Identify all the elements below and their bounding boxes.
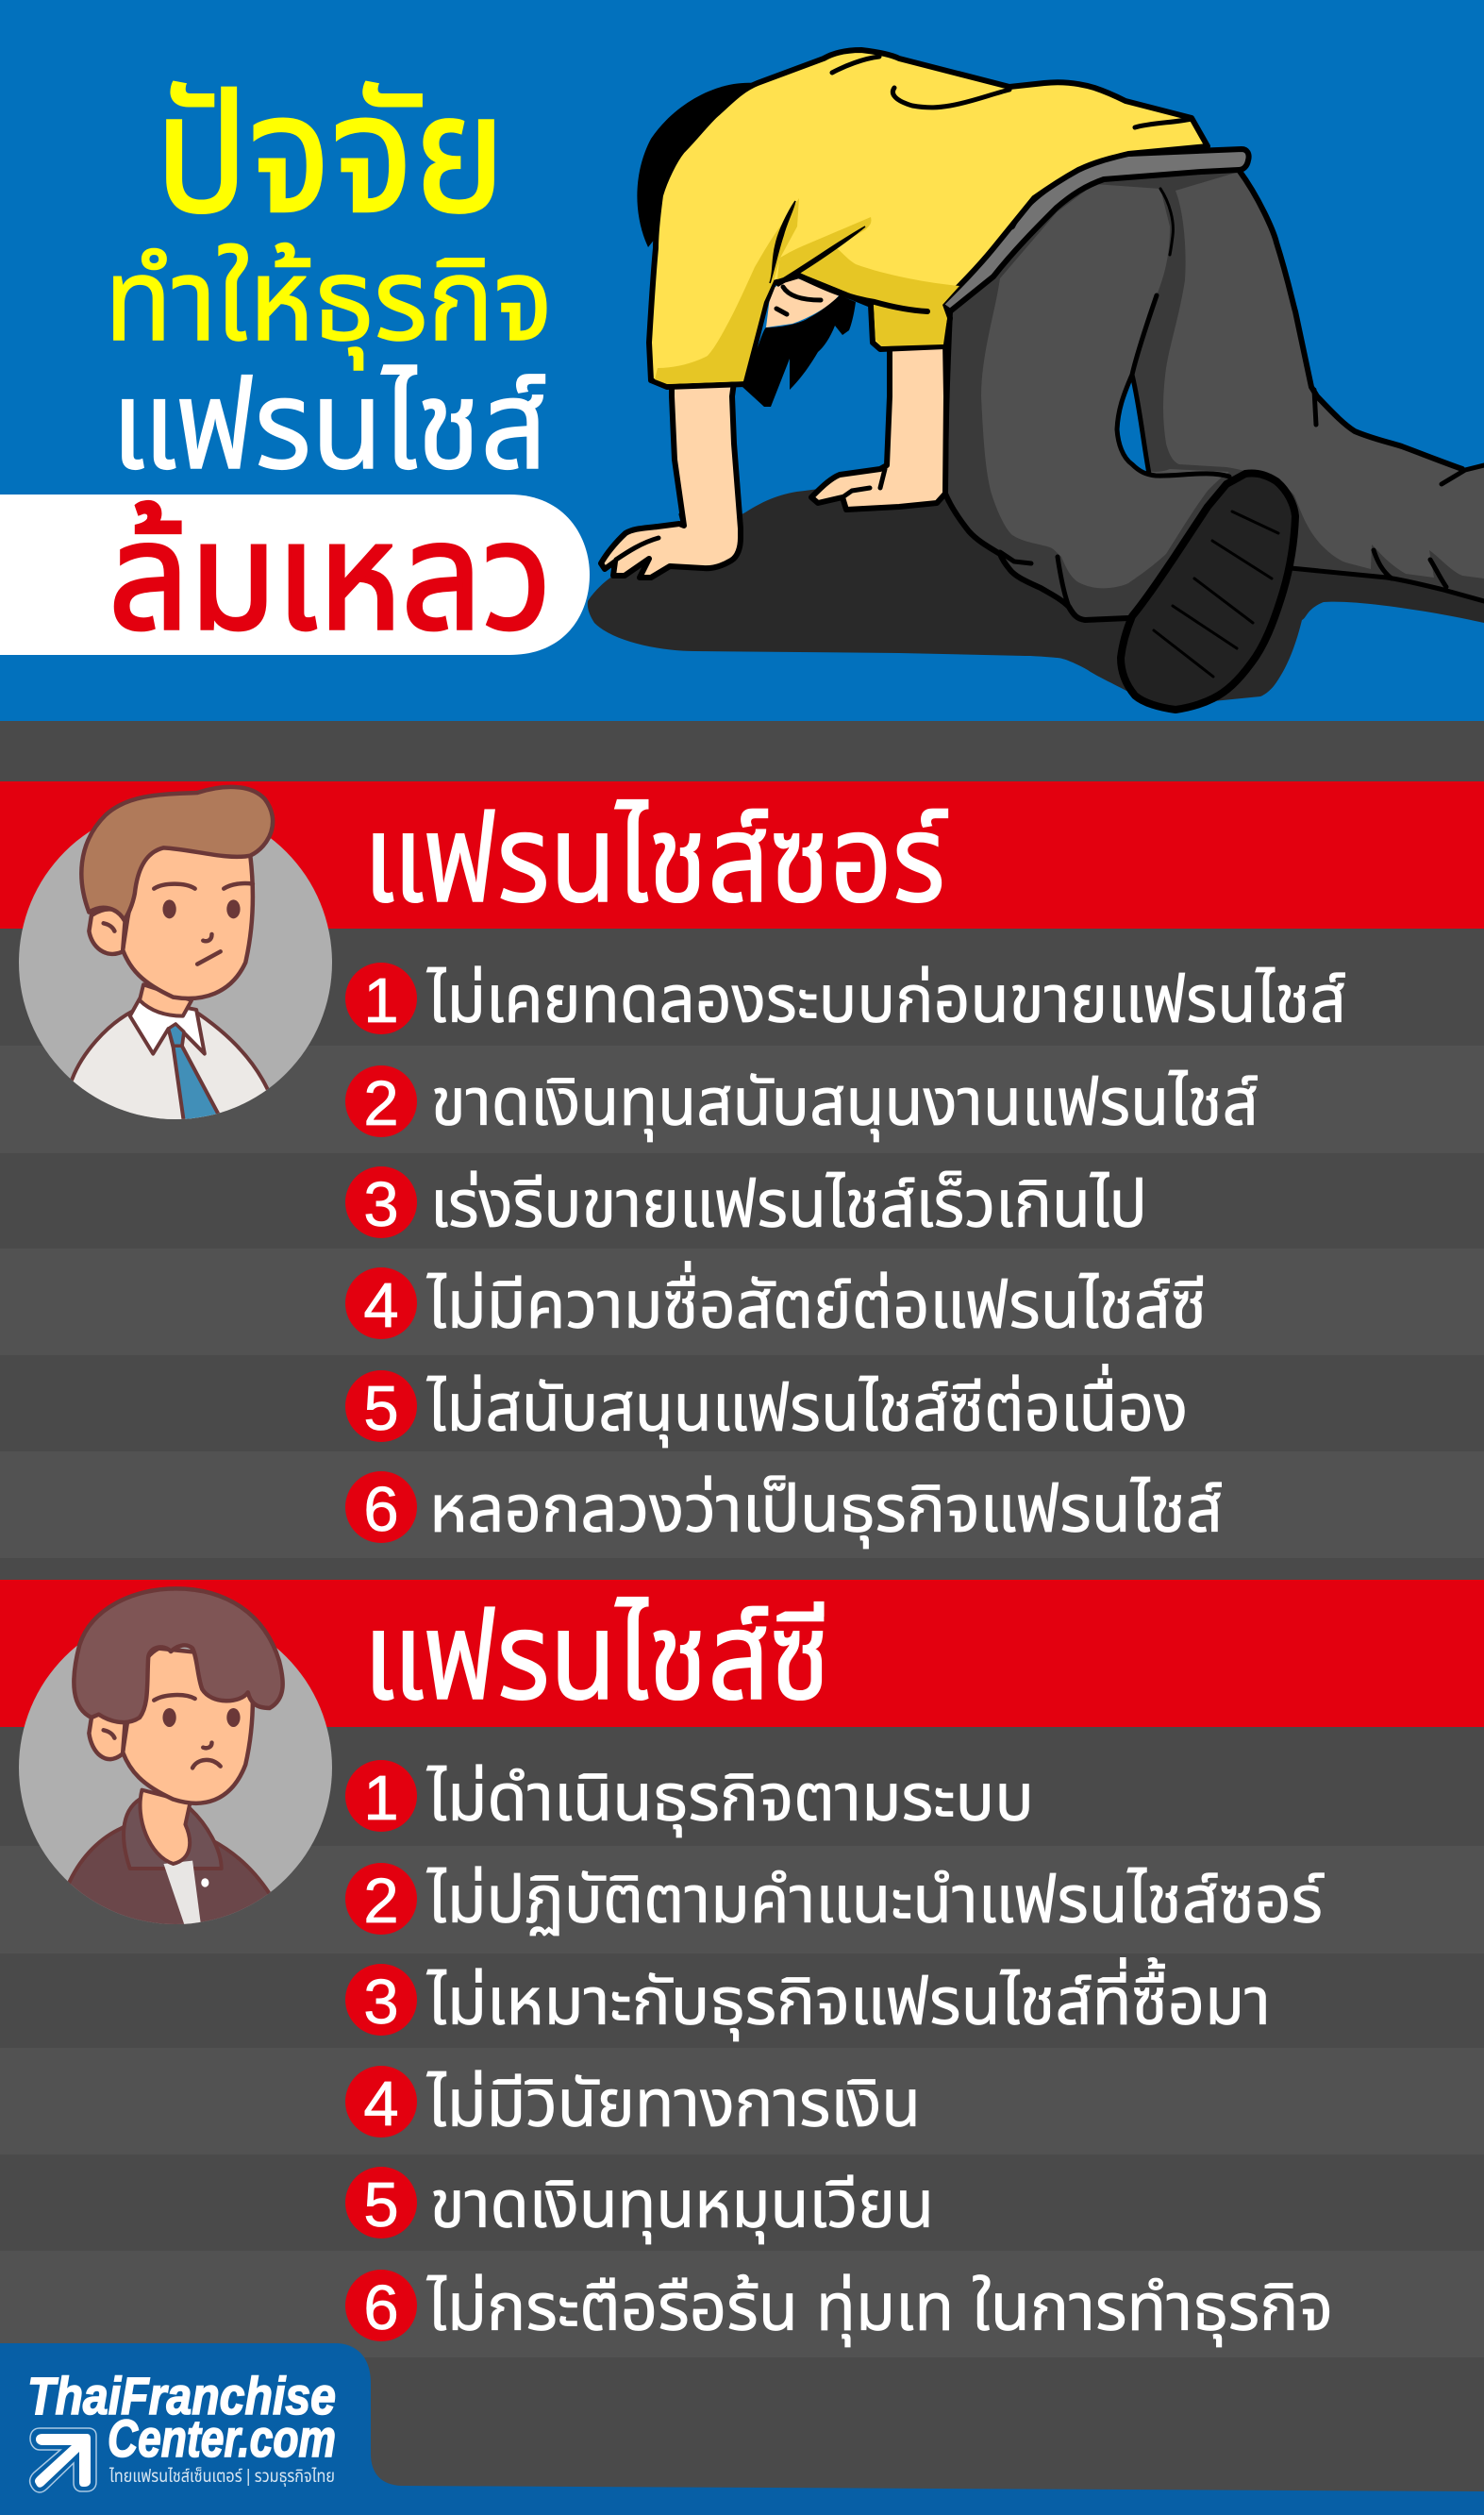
avatar: franchisor man with tie — [19, 787, 332, 1132]
list item 5: 5 — [363, 1373, 399, 1444]
list item 6: 6 — [363, 1474, 399, 1545]
list item 4: ไม่มีความซื่อสัตย์ต่อแฟรนไชส์ซี — [426, 1261, 1207, 1342]
footer: logo panel — [0, 2343, 1484, 2515]
list item 3: เร่งรีบขายแฟรนไชส์เร็วเกินไป — [430, 1167, 1147, 1241]
trousers — [945, 170, 1484, 620]
footer: logo panel: Center.com — [108, 2408, 336, 2468]
avatar: franchisee young man — [19, 1588, 332, 1935]
list item 1: ไม่ดำเนินธุรกิจตามระบบ — [426, 1761, 1034, 1837]
title line 2: ทำให้ธุรกิจ — [105, 236, 553, 370]
list item 4: 4 — [363, 1270, 399, 1341]
list item 2: 2 — [363, 1068, 399, 1139]
shoe sole — [1121, 474, 1295, 710]
list item 4: ไม่มีวินัยทางการเงิน — [426, 2067, 921, 2140]
illustration: exhausted man on hands and knees — [588, 50, 1484, 710]
list item 2: 2 — [363, 1866, 399, 1937]
panel: hero banner — [0, 0, 1484, 721]
list item 5: ขาดเงินทุนหมุนเวียน — [430, 2168, 934, 2244]
pill: fail word: ล้มเหลว — [108, 492, 552, 661]
list item 6: 6 — [363, 2272, 399, 2343]
logo tagline: ไทยแฟรนไชส์เซ็นเตอร์ | รวมธุรกิจไทย — [108, 2467, 335, 2487]
list item 6: หลอกลวงว่าเป็นธุรกิจแฟรนไชส์ — [429, 1472, 1223, 1549]
heading: franchisor: แฟรนไชส์ซอร์ — [363, 790, 948, 928]
list item 4: 4 — [363, 2069, 399, 2139]
list item 2: ขาดเงินทุนสนับสนุนงานแฟรนไชส์ — [431, 1065, 1259, 1142]
red heading band — [0, 1580, 1484, 1727]
hair falling down — [742, 295, 856, 407]
yellow shirt — [649, 50, 1208, 387]
list item 1: 1 — [363, 1763, 399, 1834]
title line 1: ปัจจัย — [155, 62, 506, 247]
left arm and hand — [601, 382, 741, 578]
face — [766, 277, 840, 327]
logo wordmark: ThaiFranchise — [27, 2366, 336, 2425]
icon: logo arrow — [30, 2428, 96, 2492]
list item 6: ไม่กระตือรือร้น ทุ่มเท ในการทำธุรกิจ — [426, 2271, 1333, 2347]
list item 3: 3 — [363, 1169, 399, 1240]
list item 5: 5 — [363, 2170, 399, 2240]
list item 2: ไม่ปฏิบัติตามคำแนะนำแฟรนไชส์ซอร์ — [426, 1863, 1325, 1937]
belt — [941, 149, 1249, 311]
list item 1: ไม่เคยทดลองระบบก่อนขายแฟรนไชส์ — [426, 963, 1346, 1036]
right arm and hand — [811, 340, 946, 510]
title line 3: แฟรนไชส์ — [111, 356, 547, 495]
list item 5: ไม่สนับสนุนแฟรนไชส์ซีต่อเนื่อง — [426, 1364, 1188, 1448]
panel: franchisee section — [0, 1580, 1484, 2357]
closed eye and brow — [776, 287, 821, 314]
list item 1: 1 — [363, 965, 399, 1036]
red heading band — [0, 781, 1484, 929]
panel: franchisor section — [0, 781, 1484, 1558]
heading: franchisee: แฟรนไชส์ซี — [363, 1587, 830, 1725]
list item 3: ไม่เหมาะกับธุรกิจแฟรนไชส์ที่ซื้อมา — [426, 1957, 1271, 2041]
list item 3: 3 — [363, 1967, 399, 2037]
